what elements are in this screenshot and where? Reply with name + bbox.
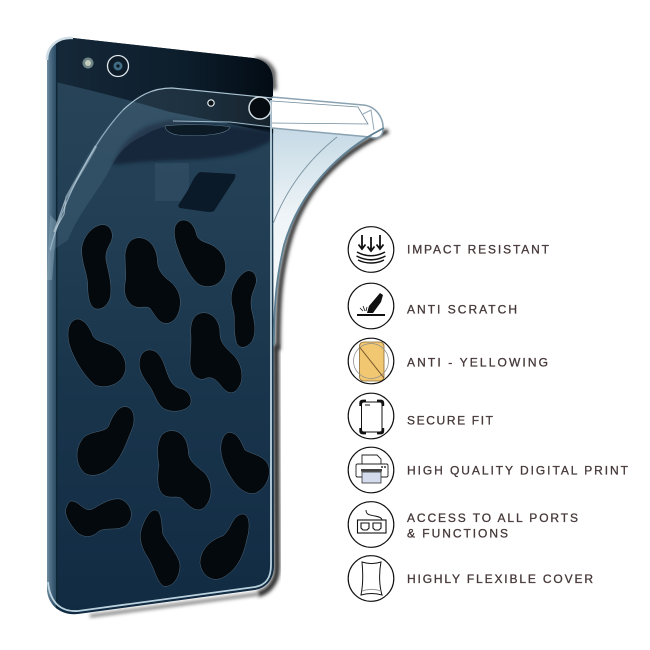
feature: anti yellowing	[348, 338, 548, 384]
black animal print spots upper	[68, 220, 256, 411]
silver top corner	[47, 38, 73, 60]
flash	[82, 58, 94, 68]
label: ANTI SCRATCH	[407, 302, 517, 316]
feature: highly flexible cover	[348, 556, 593, 601]
camera ring	[108, 56, 128, 76]
lighter lens square	[155, 163, 189, 201]
label: IMPACT RESISTANT	[407, 242, 550, 256]
icon: printer	[348, 447, 394, 493]
feature: secure fit	[348, 393, 494, 439]
icon: fitted case	[348, 393, 394, 439]
feature: impact resistant	[348, 227, 550, 272]
icon: ports	[348, 502, 394, 547]
icon: impact arrows	[348, 227, 394, 272]
label line 2: & FUNCTIONS	[407, 526, 508, 540]
transparent cover flexed wedge	[272, 128, 384, 345]
black animal print spots lower	[66, 407, 269, 586]
drop shadow of phone and cover	[90, 57, 388, 616]
feature: high quality digital print	[348, 447, 629, 493]
camera cutout in cover	[165, 97, 271, 136]
label: ACCESS TO ALL PORTS	[407, 511, 578, 525]
cover top flap	[47, 88, 383, 280]
left metal edge	[47, 44, 56, 608]
glossy dark upper band	[58, 38, 274, 134]
label: SECURE FIT	[407, 414, 494, 428]
cover inner curved line	[273, 137, 337, 224]
feature: anti scratch	[348, 283, 517, 329]
bottom clear edge	[48, 100, 271, 611]
diamond fingerprint cutout	[178, 172, 235, 212]
feature: access to ports	[348, 502, 578, 547]
phone body	[46, 30, 280, 620]
label: HIGHLY FLEXIBLE COVER	[407, 572, 593, 586]
label: HIGH QUALITY DIGITAL PRINT	[407, 464, 629, 478]
side button	[66, 146, 96, 198]
phone cover illustration	[46, 30, 388, 620]
icon: scratch blade	[348, 283, 394, 329]
dark reflection under cover	[112, 120, 272, 165]
icon: flexible cover	[348, 556, 394, 601]
label: ANTI - YELLOWING	[407, 356, 548, 370]
icon: yellowed case	[348, 338, 394, 384]
cover curved edge	[274, 128, 384, 345]
